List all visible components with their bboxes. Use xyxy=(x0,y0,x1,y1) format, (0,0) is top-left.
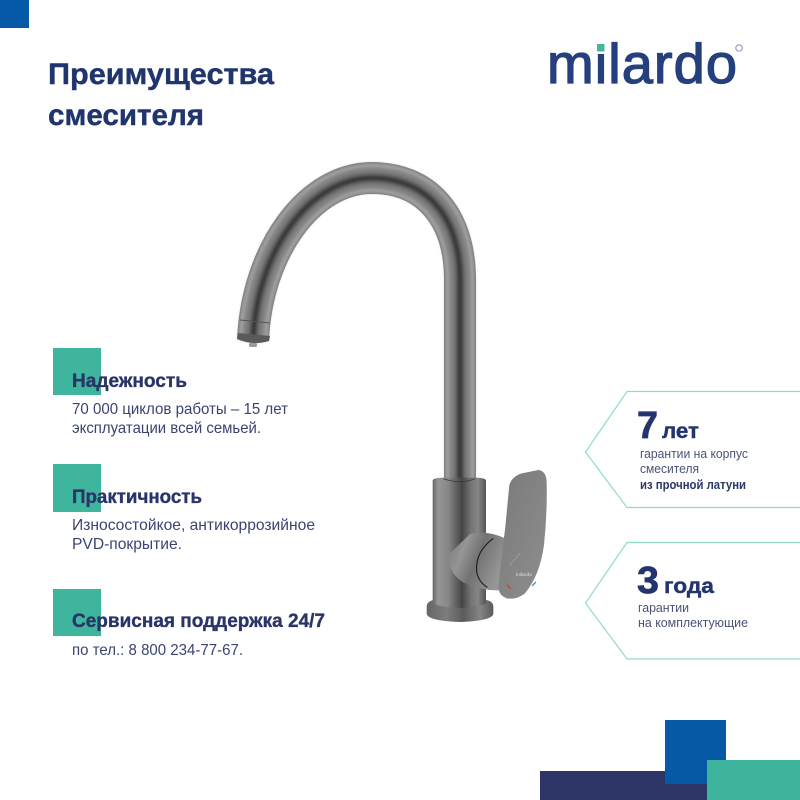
feature: practicality: Износостойкое, антикоррозийное xyxy=(72,517,315,534)
faucet body xyxy=(427,470,547,622)
aerator nozzle xyxy=(237,333,270,347)
feature: reliability: Надежность xyxy=(72,371,187,392)
feature: practicality: Практичность xyxy=(72,487,202,508)
callout: 7 years warranty: 7 xyxy=(637,405,658,447)
handle markings xyxy=(506,553,536,589)
feature: reliability: 70 000 циклов работы – 15 лет xyxy=(72,401,289,418)
callout: 7 years warranty: лет xyxy=(662,420,699,443)
title xyxy=(48,58,274,132)
feature: service support xyxy=(53,589,325,659)
callout: 7 years warranty: смесителя xyxy=(640,462,699,476)
feature: practicality xyxy=(53,464,315,553)
callout: 3 years warranty: гарантии xyxy=(638,601,689,615)
callout: 7 years warranty: гарантии на корпус xyxy=(640,447,748,461)
lever handle xyxy=(499,470,547,599)
feature: service support: Сервисная поддержка 24/7 xyxy=(72,611,325,632)
corner blocks xyxy=(540,720,800,800)
callout: 3 years warranty xyxy=(586,542,800,659)
callout: 3 years warranty: на комплектующие xyxy=(638,616,748,630)
handle markings: milardo xyxy=(516,572,532,578)
feature: reliability xyxy=(53,348,289,437)
spout tube xyxy=(240,178,460,500)
logo: milardo: milardo xyxy=(547,32,737,95)
callout: 3 years warranty: года xyxy=(664,575,714,598)
collar column xyxy=(433,478,486,608)
feature: service support: по тел.: 8 800 234-77-67. xyxy=(72,642,243,659)
callout: 7 years warranty: из прочной латуни xyxy=(640,478,746,492)
callout: 3 years warranty: 3 xyxy=(637,560,659,602)
feature: reliability: эксплуатации всей семьей. xyxy=(72,420,261,437)
base ring xyxy=(427,600,493,622)
corner square xyxy=(0,0,29,28)
feature: practicality: PVD-покрытие. xyxy=(72,536,182,553)
callout: 7 years warranty xyxy=(586,392,800,508)
title: смесителя xyxy=(48,99,204,132)
mixer hub xyxy=(447,533,505,590)
title: Преимущества xyxy=(48,58,274,91)
faucet illustration xyxy=(237,178,547,622)
